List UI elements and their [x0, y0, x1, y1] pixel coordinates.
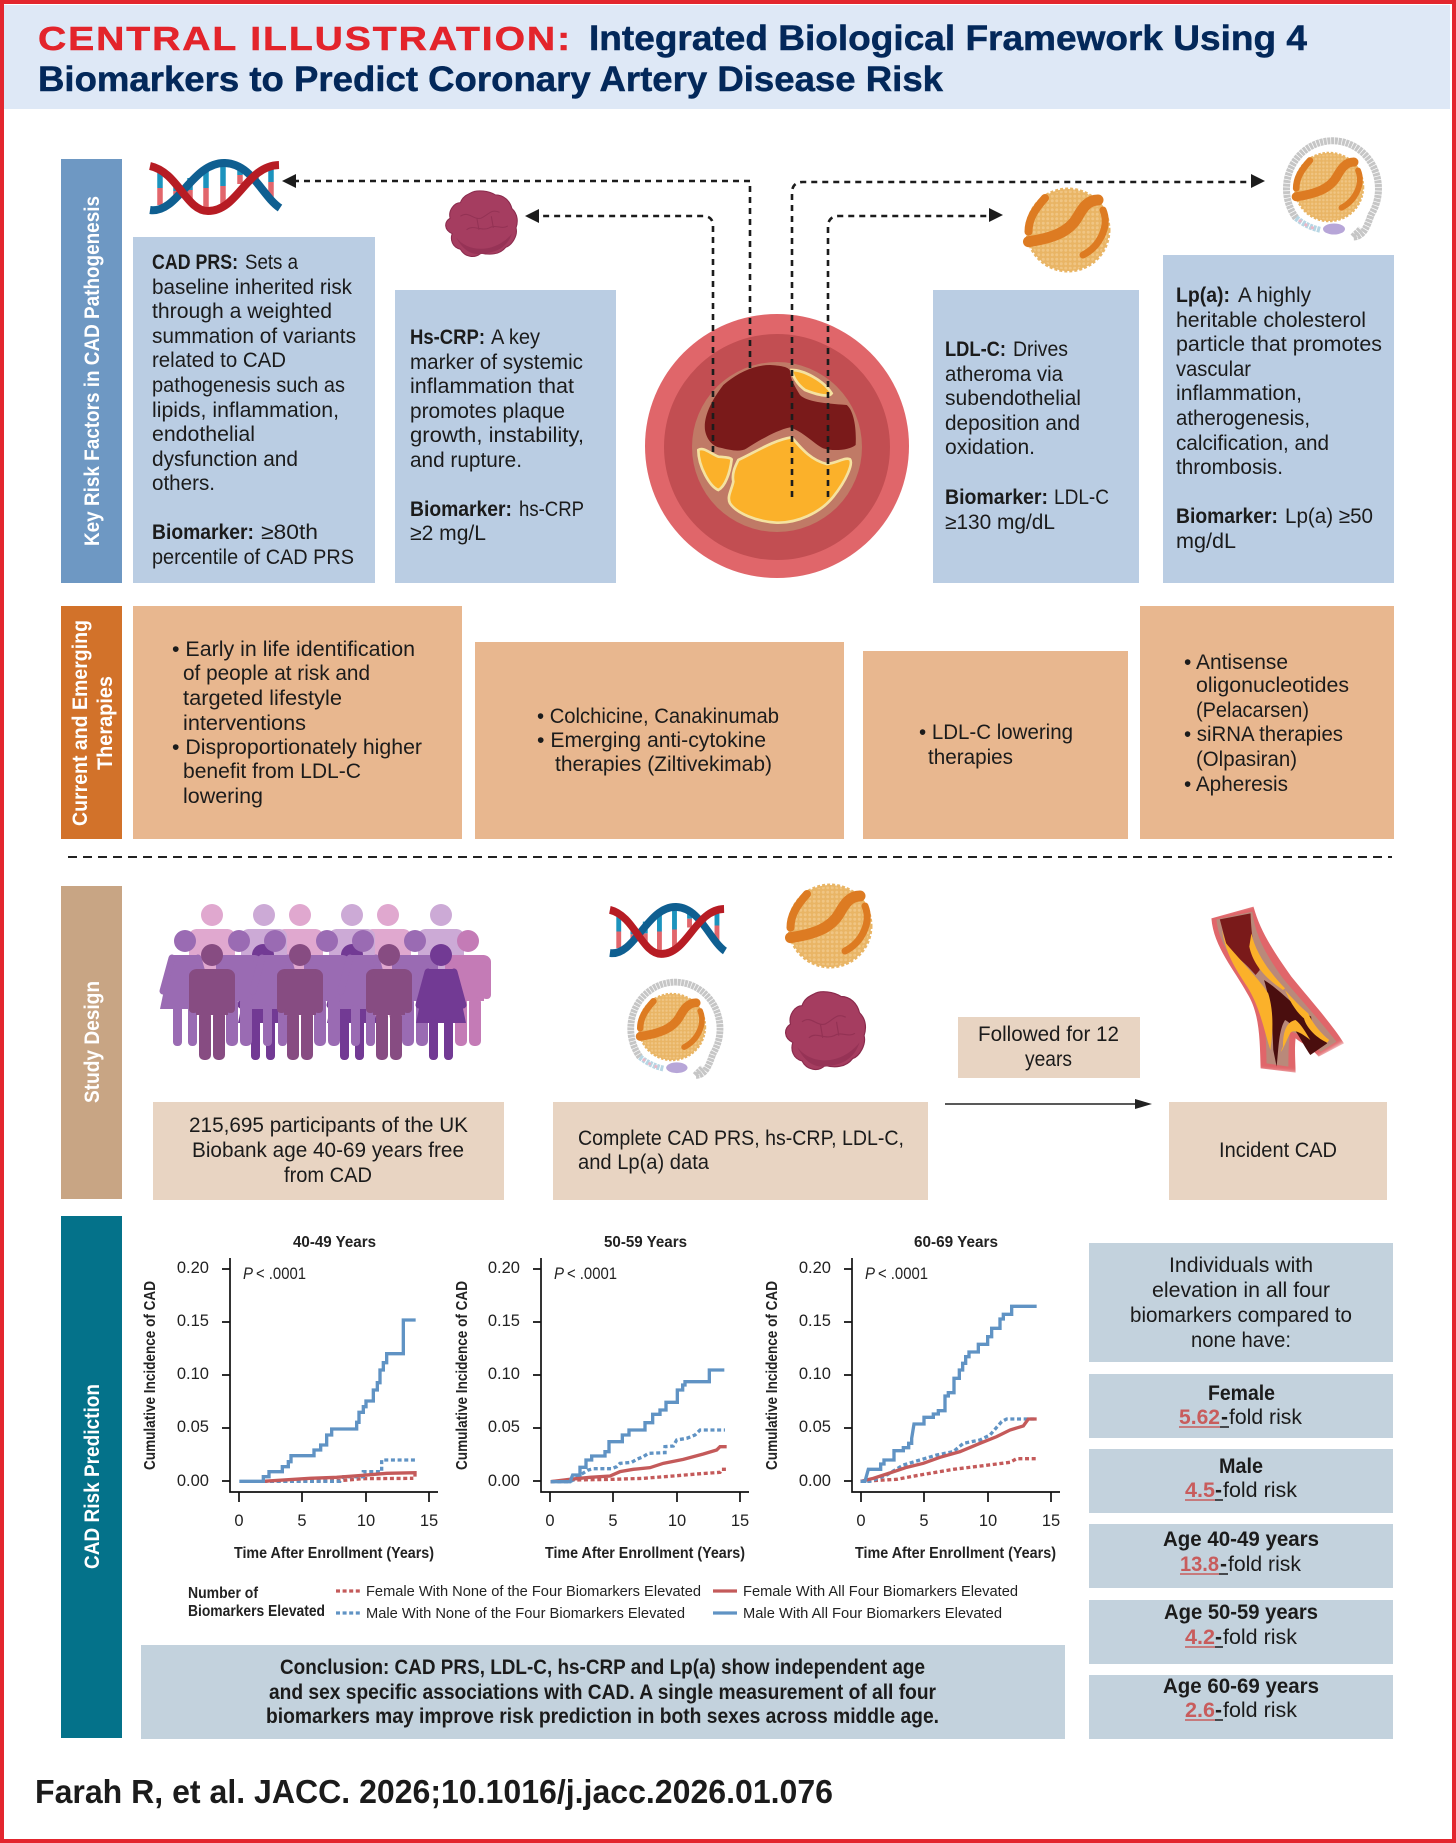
chart: 40-49 years: < .0001	[256, 1265, 306, 1283]
chart: 40-49 years: 10	[357, 1512, 375, 1530]
panel: CAD PRS therapies	[133, 606, 462, 839]
panel: participants: Biobank age 40-69 years free	[192, 1139, 464, 1162]
chart: 60-69 years: < .0001	[878, 1265, 928, 1283]
panel: incident CAD: Incident CAD	[1219, 1139, 1337, 1162]
panel: Lp(a): Lp(a):	[1176, 284, 1230, 307]
panel: age 50-59 risk: fold risk	[1223, 1626, 1298, 1649]
panel: participants: 215,695 participants of the UK	[189, 1114, 468, 1137]
legend: Male With None of the Four Biomarkers Elevated	[366, 1605, 685, 1622]
conclusion: Conclusion: CAD PRS, LDL-C, hs-CRP and Lp(a) show independent age	[280, 1656, 925, 1679]
section bar: therapies	[61, 606, 122, 839]
conclusion: and sex specific associations with CAD. A single measurement of all four	[269, 1681, 936, 1704]
chart: 40-49 years: 0.20	[177, 1259, 209, 1277]
panel: CAD PRS: ≥80th	[261, 521, 318, 544]
panel: Lp(a) therapies: • Apheresis	[1184, 773, 1288, 796]
chart: 60-69 years: Time After Enrollment (Years)	[855, 1545, 1056, 1562]
panel: participants: from CAD	[284, 1164, 372, 1187]
arrow: to hs-CRP	[525, 209, 713, 452]
panel: CAD PRS	[133, 237, 375, 583]
panel: CAD PRS: pathogenesis such as	[152, 374, 345, 397]
panel: age 60-69 risk	[1089, 1675, 1393, 1739]
title: Integrated Biological Framework Using 4	[589, 18, 1307, 58]
icon: hs-CRP blob	[446, 191, 517, 256]
panel: Hs-CRP	[395, 290, 616, 583]
panel: Hs-CRP: promotes plaque	[410, 400, 565, 423]
panel: age 60-69 risk: -	[1215, 1699, 1222, 1722]
panel: female risk: 5.62	[1179, 1406, 1220, 1429]
chart: 40-49 years: 0.10	[177, 1365, 209, 1383]
title: CENTRAL ILLUSTRATION:	[38, 20, 572, 57]
panel: Hs-CRP: hs-CRP	[519, 498, 584, 521]
panel: Hs-CRP: Hs-CRP:	[410, 326, 485, 349]
panel: CAD PRS therapies: benefit from LDL-C	[183, 760, 361, 783]
panel: female risk	[1089, 1374, 1393, 1438]
panel: CAD PRS: lipids, inflammation,	[152, 399, 339, 422]
panel: LDL-C therapies	[863, 651, 1128, 839]
panel: CAD PRS: Sets a	[245, 251, 298, 274]
panel: male risk: -	[1215, 1479, 1222, 1502]
chart: 50-59 years: Time After Enrollment (Years)	[545, 1545, 745, 1562]
section bar: therapies: Current and Emerging	[69, 620, 92, 826]
panel: age 60-69 risk: 2.6	[1185, 1699, 1215, 1722]
panel: CAD PRS: percentile of CAD PRS	[152, 546, 354, 569]
chart: 60-69 years: 5	[919, 1512, 929, 1530]
panel: Lp(a): A highly	[1238, 284, 1311, 307]
chart: 40-49 years: Time After Enrollment (Years)	[234, 1545, 434, 1562]
section bar: study design: Study Design	[81, 981, 104, 1103]
chart: 60-69 years: 0.10	[799, 1365, 831, 1383]
legend: Biomarkers Elevated	[188, 1603, 325, 1620]
panel: LDL-C: oxidation.	[945, 436, 1035, 459]
panel: CAD PRS: endothelial	[152, 423, 255, 446]
panel: Hs-CRP: A key	[491, 326, 540, 349]
panel: Lp(a): vascular	[1176, 358, 1251, 381]
chart: 60-69 years: 0.15	[799, 1312, 831, 1330]
chart: 40-49 years: 15	[420, 1512, 438, 1530]
chart: 50-59 years: 15	[731, 1512, 749, 1530]
panel: risk intro: Individuals with	[1169, 1254, 1313, 1277]
chart: 60-69 years	[764, 1234, 1060, 1562]
panel: LDL-C: deposition and	[945, 412, 1080, 435]
panel: CAD PRS: baseline inherited risk	[152, 276, 352, 299]
section bar: therapies: Therapies	[94, 676, 117, 770]
title	[38, 18, 1307, 99]
chart: 60-69 years: 60-69 Years	[914, 1234, 998, 1251]
panel: Hs-CRP: ≥2 mg/L	[410, 522, 486, 545]
panel: male risk: fold risk	[1223, 1479, 1298, 1502]
panel: CAD PRS therapies: lowering	[183, 785, 263, 808]
chart: 50-59 years: 10	[668, 1512, 686, 1530]
panel: incident CAD	[1169, 1102, 1387, 1200]
panel: Lp(a): Lp(a) ≥50	[1285, 505, 1373, 528]
panel: LDL-C: Drives	[1013, 338, 1068, 361]
chart: 40-49 years: 0.00	[177, 1472, 209, 1490]
chart: 40-49 years: 0	[234, 1512, 244, 1530]
panel: Lp(a) therapies: (Pelacarsen)	[1196, 699, 1309, 722]
panel: CAD PRS: others.	[152, 472, 215, 495]
chart: 50-59 years: 5	[608, 1512, 618, 1530]
panel: Hs-CRP: and rupture.	[410, 449, 522, 472]
legend: Female With All Four Biomarkers Elevated	[743, 1583, 1018, 1600]
panel: Lp(a) therapies	[1140, 606, 1394, 839]
panel: CAD PRS therapies: • Disproportionately higher	[172, 736, 422, 759]
panel: CAD PRS therapies: interventions	[183, 712, 306, 735]
panel: age 40-49 risk: Age 40-49 years	[1163, 1528, 1319, 1551]
panel: data: and Lp(a) data	[578, 1151, 709, 1174]
icon: LDL particle small	[789, 885, 871, 967]
panel: risk intro: elevation in all four	[1152, 1279, 1330, 1302]
chart: 50-59 years: P	[554, 1265, 564, 1283]
chart: 60-69 years: 15	[1042, 1512, 1060, 1530]
chart: 60-69 years: Cumulative Incidence of CAD	[764, 1281, 781, 1470]
panel: CAD PRS: CAD PRS:	[152, 251, 238, 274]
arrow: to Lp(a)	[792, 174, 1265, 497]
panel: Lp(a) therapies: oligonucleotides	[1196, 674, 1349, 697]
chart: 40-49 years: 0.15	[177, 1312, 209, 1330]
legend: Number of	[188, 1585, 259, 1602]
chart: 60-69 years: 0	[856, 1512, 866, 1530]
panel: LDL-C: atheroma via	[945, 363, 1063, 386]
chart: 40-49 years: P	[243, 1265, 253, 1283]
section bar: study design	[61, 886, 122, 1199]
panel: data	[553, 1102, 928, 1200]
chart: 50-59 years: 50-59 Years	[604, 1234, 687, 1251]
chart: 50-59 years	[454, 1234, 749, 1562]
panel: hs-CRP therapies: therapies (Ziltivekimab)	[555, 753, 772, 776]
panel: LDL-C therapies: therapies	[928, 746, 1013, 769]
panel: Lp(a): thrombosis.	[1176, 456, 1283, 479]
panel: LDL-C: LDL-C	[1054, 486, 1109, 509]
panel: CAD PRS: dysfunction and	[152, 448, 298, 471]
legend: Female With None of the Four Biomarkers Elevated	[366, 1583, 701, 1600]
title: Biomarkers to Predict Coronary Artery Disease Risk	[38, 59, 943, 99]
chart: 60-69 years: 0.00	[799, 1472, 831, 1490]
icon: hs-CRP blob small	[786, 992, 865, 1070]
panel: age 50-59 risk: -	[1215, 1626, 1222, 1649]
citation footer: Farah R, et al. JACC. 2026;10.1016/j.jacc.2026.01.076	[35, 1773, 833, 1810]
header band	[4, 5, 1450, 109]
panel: Lp(a): atherogenesis,	[1176, 407, 1310, 430]
panel: LDL-C: LDL-C:	[945, 338, 1006, 361]
panel: LDL-C	[933, 290, 1139, 583]
panel: CAD PRS therapies: targeted lifestyle	[183, 687, 342, 710]
panel: risk intro	[1089, 1243, 1393, 1362]
chart: 50-59 years: < .0001	[567, 1265, 617, 1283]
chart: 60-69 years: P	[865, 1265, 875, 1283]
panel: female risk: Female	[1208, 1382, 1275, 1405]
arrow: follow up	[945, 1099, 1152, 1109]
panel: CAD PRS: through a weighted	[152, 300, 332, 323]
section bar: CAD risk prediction: CAD Risk Prediction	[81, 1384, 104, 1569]
icon: Lp(a) particle	[1286, 141, 1378, 237]
panel: Hs-CRP: marker of systemic	[410, 351, 583, 374]
panel: CAD PRS: summation of variants	[152, 325, 356, 348]
panel: hs-CRP therapies: • Colchicine, Canakinumab	[537, 705, 779, 728]
panel: male risk	[1089, 1449, 1393, 1513]
panel: age 40-49 risk: 13.8	[1180, 1553, 1219, 1576]
panel: participants	[153, 1102, 504, 1200]
panel: Lp(a): mg/dL	[1176, 530, 1236, 553]
panel: LDL-C: ≥130 mg/dL	[945, 511, 1055, 534]
panel: Lp(a): calcification, and	[1176, 432, 1329, 455]
panel: Lp(a): inflammation,	[1176, 382, 1302, 405]
panel: LDL-C therapies: • LDL-C lowering	[919, 721, 1073, 744]
chart: 40-49 years	[142, 1234, 438, 1562]
chart: 50-59 years: 0.10	[488, 1365, 520, 1383]
arrow: to LDL	[828, 208, 1003, 497]
panel: age 40-49 risk	[1089, 1524, 1393, 1588]
section bar: key risk factors: Key Risk Factors in CAD Pathogenesis	[81, 196, 104, 546]
chart: 50-59 years: 0.00	[488, 1472, 520, 1490]
panel: age 60-69 risk: Age 60-69 years	[1163, 1675, 1319, 1698]
panel: hs-CRP therapies	[475, 642, 844, 839]
panel: CAD PRS: related to CAD	[152, 349, 286, 372]
panel: male risk: 4.5	[1185, 1479, 1215, 1502]
chart: 40-49 years: Cumulative Incidence of CAD	[142, 1281, 159, 1470]
chart: 60-69 years: 0.05	[799, 1418, 831, 1436]
panel: CAD PRS: Biomarker:	[152, 521, 254, 544]
panel: age 40-49 risk: fold risk	[1228, 1553, 1301, 1576]
panel: age 40-49 risk: -	[1220, 1553, 1227, 1576]
panel: CAD PRS therapies: of people at risk and	[183, 662, 370, 685]
conclusion	[141, 1645, 1065, 1739]
panel: follow up: Followed for 12	[978, 1023, 1119, 1046]
panel: age 50-59 risk: 4.2	[1185, 1626, 1215, 1649]
icon: Lp(a) particle small	[631, 982, 720, 1076]
panel: Lp(a): particle that promotes	[1176, 333, 1382, 356]
chart: 50-59 years: 0	[545, 1512, 555, 1530]
panel: Lp(a) therapies: • Antisense	[1184, 651, 1288, 674]
arrow: to DNA	[282, 174, 750, 368]
icon: DNA small	[610, 907, 725, 954]
section bar: key risk factors	[61, 159, 122, 583]
panel: Hs-CRP: growth, instability,	[410, 424, 584, 447]
chart: 50-59 years: Cumulative Incidence of CAD	[454, 1281, 471, 1470]
conclusion: biomarkers may improve risk prediction in both sexes across middle age.	[266, 1705, 939, 1728]
panel: follow up: years	[1025, 1048, 1072, 1071]
panel: LDL-C: Biomarker:	[945, 486, 1048, 509]
panel: follow up	[958, 1017, 1140, 1078]
legend	[188, 1583, 1018, 1622]
chart: 40-49 years: 5	[297, 1512, 307, 1530]
panel: Lp(a): Biomarker:	[1176, 505, 1278, 528]
chart: 60-69 years: 10	[979, 1512, 997, 1530]
section bar: CAD risk prediction	[61, 1216, 122, 1738]
chart: 50-59 years: 0.05	[488, 1418, 520, 1436]
panel: data: Complete CAD PRS, hs-CRP, LDL-C,	[578, 1127, 904, 1150]
panel: Lp(a) therapies: • siRNA therapies	[1184, 723, 1343, 746]
panel: Hs-CRP: inflammation that	[410, 375, 574, 398]
icon: artery cross section	[645, 314, 909, 578]
chart: 50-59 years: 0.15	[488, 1312, 520, 1330]
panel: CAD PRS therapies: • Early in life identification	[172, 638, 415, 661]
chart: 40-49 years: 0.05	[177, 1418, 209, 1436]
panel: female risk: -	[1221, 1406, 1228, 1429]
panel: age 50-59 risk	[1089, 1600, 1393, 1664]
panel: LDL-C: subendothelial	[945, 387, 1081, 410]
panel: female risk: fold risk	[1229, 1406, 1302, 1429]
panel: male risk: Male	[1219, 1455, 1263, 1478]
chart: 60-69 years: 0.20	[799, 1259, 831, 1277]
panel: hs-CRP therapies: • Emerging anti-cytokine	[537, 729, 766, 752]
chart: 40-49 years: 40-49 Years	[293, 1234, 376, 1251]
panel: age 60-69 risk: fold risk	[1223, 1699, 1298, 1722]
icon: LDL particle	[1027, 189, 1109, 271]
icon: DNA	[150, 163, 280, 211]
chart: 50-59 years: 0.20	[488, 1259, 520, 1277]
panel: risk intro: biomarkers compared to	[1130, 1304, 1352, 1327]
panel: Lp(a): heritable cholesterol	[1176, 309, 1366, 332]
panel: Lp(a) therapies: (Olpasiran)	[1196, 748, 1297, 771]
icon: diseased artery	[1207, 898, 1350, 1078]
panel: age 50-59 risk: Age 50-59 years	[1164, 1601, 1318, 1624]
panel: risk intro: none have:	[1191, 1329, 1291, 1352]
icon: crowd of people	[160, 904, 491, 1060]
panel: Hs-CRP: Biomarker:	[410, 498, 512, 521]
legend: Male With All Four Biomarkers Elevated	[743, 1605, 1002, 1622]
panel: Lp(a)	[1163, 255, 1394, 583]
